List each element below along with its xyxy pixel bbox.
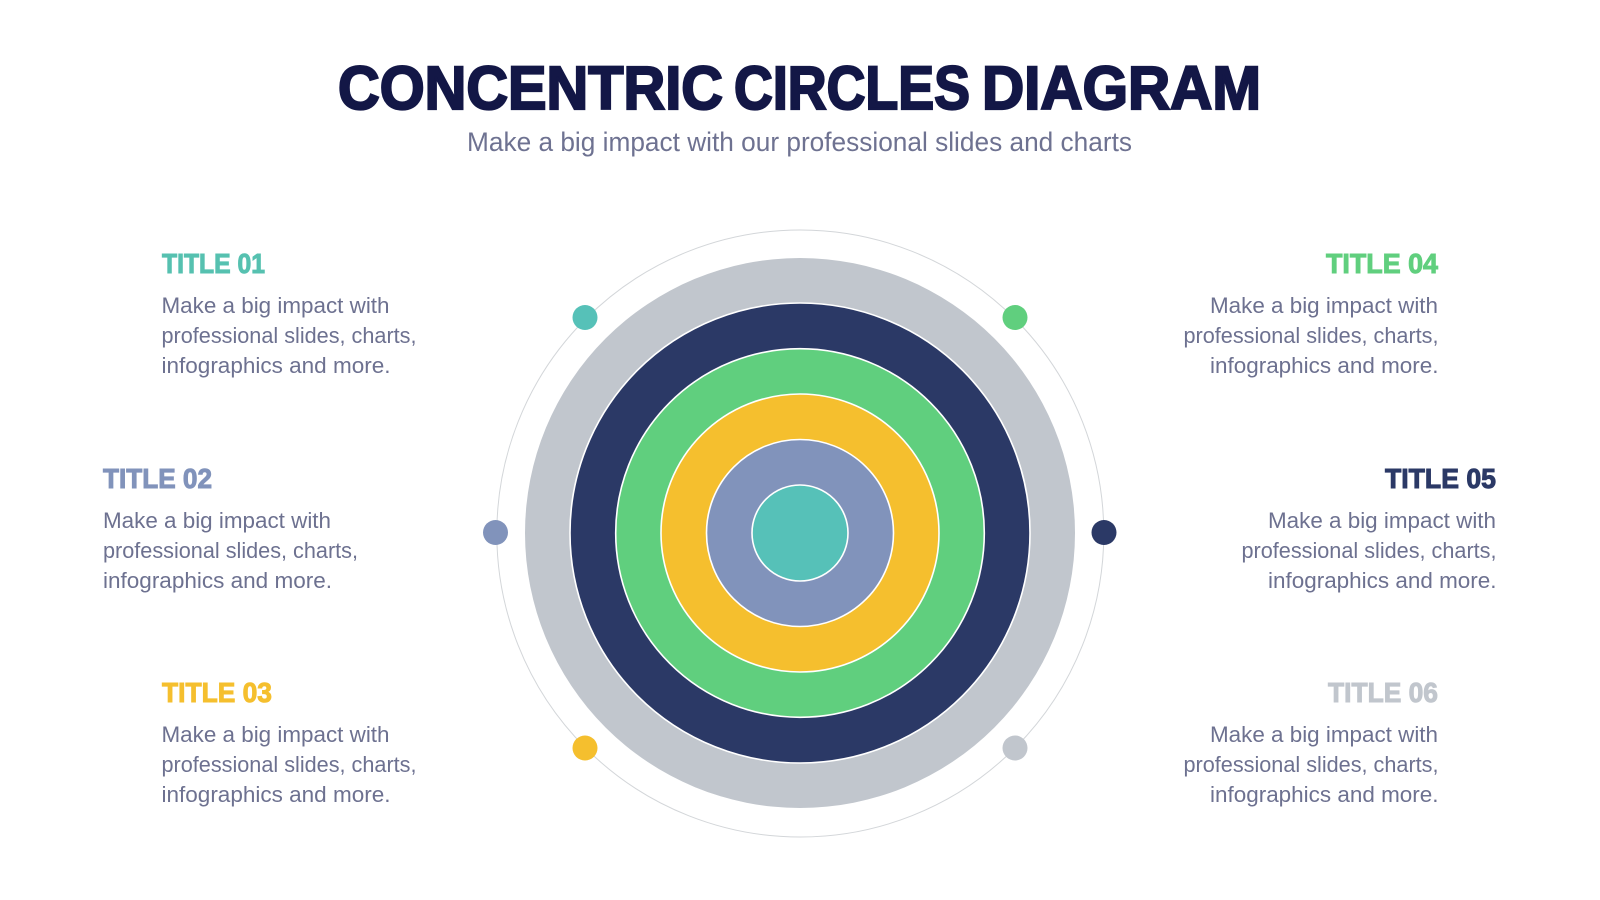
body: title 04: infographics and more. [1210, 353, 1438, 378]
body: title 06: Make a big impact with [1210, 722, 1438, 747]
body: title 02: Make a big impact with [103, 508, 331, 533]
body: title 03: Make a big impact with [162, 722, 390, 747]
text block: title 03 [162, 677, 416, 807]
body: title 03: professional slides, charts, [162, 752, 416, 777]
ring: blue [706, 440, 894, 626]
body: title 01: professional slides, charts, [162, 323, 416, 348]
text block: title 06 [1184, 677, 1438, 807]
heading: title 02: TITLE 02 [103, 463, 212, 494]
heading: title 03: TITLE 03 [162, 677, 272, 708]
dot: teal [572, 305, 598, 330]
body: title 01: infographics and more. [162, 353, 390, 378]
text block: title 05 [1242, 463, 1496, 593]
title: CONCENTRIC [338, 54, 723, 122]
dot: blue [483, 520, 508, 545]
body: title 03 [162, 722, 416, 807]
body: title 02 [103, 508, 358, 593]
body: title 05: professional slides, charts, [1242, 538, 1496, 563]
dot: yellow [572, 736, 598, 760]
dot: gray [1002, 736, 1028, 760]
ring: navy [570, 303, 1030, 763]
body: title 01: Make a big impact with [162, 293, 390, 318]
text block: title 04 [1184, 248, 1438, 378]
concentric circles diagram [483, 230, 1116, 837]
heading: title 01: TITLE 01 [162, 248, 265, 279]
ring: green [616, 349, 984, 717]
text block: title 02 [103, 463, 358, 593]
body: title 06: professional slides, charts, [1184, 752, 1438, 777]
ring: yellow [661, 394, 939, 672]
body: title 06 [1184, 722, 1438, 807]
body: title 03: infographics and more. [162, 782, 390, 807]
heading: title 05: TITLE 05 [1385, 463, 1496, 494]
body: title 04: Make a big impact with [1210, 293, 1438, 318]
body: title 05: infographics and more. [1268, 568, 1496, 593]
title: CIRCLES [734, 54, 970, 122]
body: title 06: infographics and more. [1210, 782, 1438, 807]
core: teal [752, 485, 848, 581]
dot: green [1002, 305, 1028, 330]
body: title 05 [1242, 508, 1496, 593]
body: title 02: infographics and more. [103, 568, 332, 593]
ring: gray [525, 258, 1075, 808]
body: title 01 [162, 293, 416, 378]
title [338, 54, 1261, 122]
body: title 05: Make a big impact with [1268, 508, 1496, 533]
subtitle: Make a big impact with our professional slides and charts [467, 127, 1132, 157]
text block: title 01 [162, 248, 416, 378]
dot: navy [1092, 520, 1116, 545]
heading: title 04: TITLE 04 [1326, 248, 1438, 279]
outer orbit ring [497, 230, 1104, 837]
body: title 04: professional slides, charts, [1184, 323, 1438, 348]
title: DIAGRAM [982, 54, 1261, 122]
heading: title 06: TITLE 06 [1328, 677, 1438, 708]
body: title 04 [1184, 293, 1438, 378]
body: title 02: professional slides, charts, [103, 538, 358, 563]
